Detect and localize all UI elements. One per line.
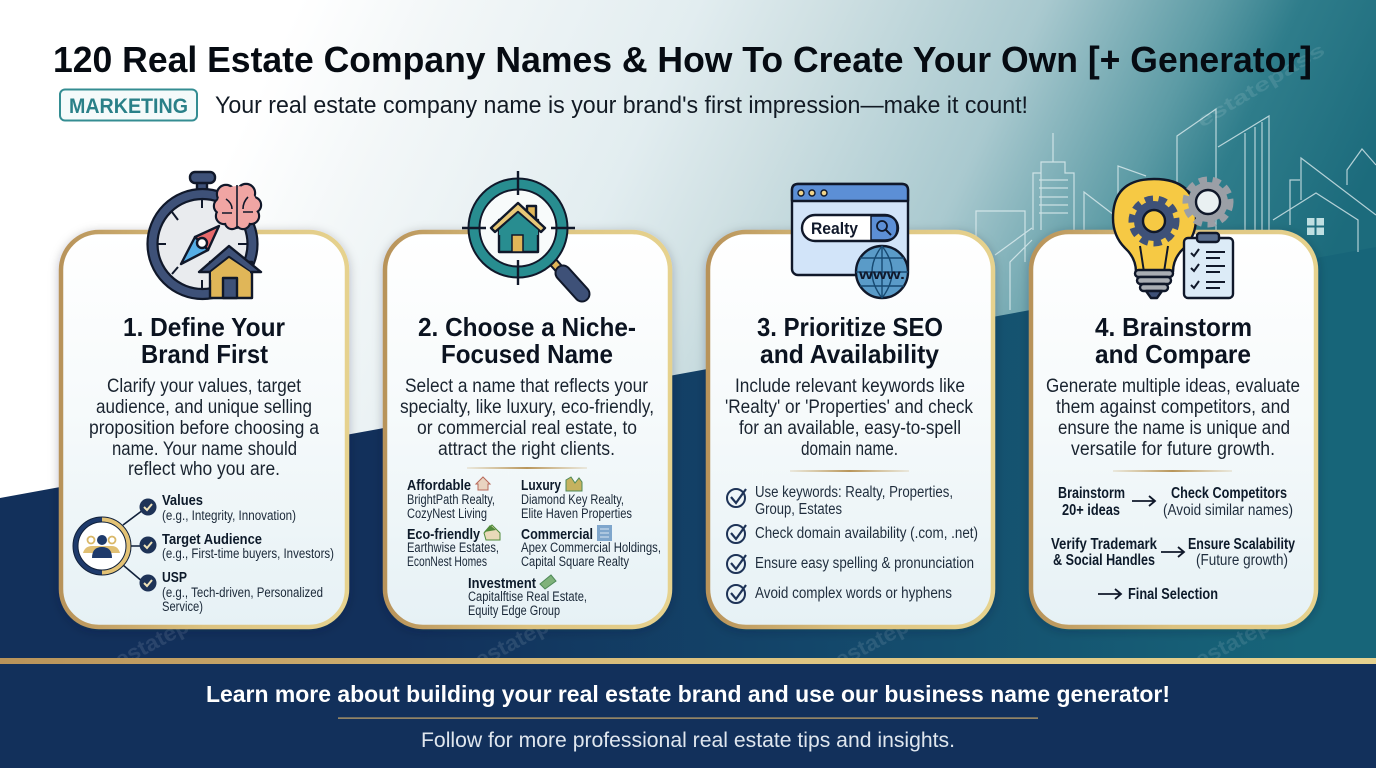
heading: 1. Define Your	[123, 312, 285, 342]
name list: affordable: BrightPath Realty,	[407, 492, 495, 507]
footer follow line: Follow for more professional real estate tips and insights.	[421, 729, 955, 752]
arrow	[1132, 496, 1155, 506]
name list: luxury	[521, 477, 632, 521]
name list: commercial: Capital Square Realty	[521, 554, 629, 569]
flow step: check competitors	[1163, 485, 1293, 519]
list: target audience	[140, 531, 334, 561]
arrow	[1098, 589, 1121, 599]
list: values	[140, 492, 296, 523]
watermarks: estatep	[831, 613, 913, 672]
checklist item: spelling: Ensure easy spelling & pronunciation	[755, 555, 974, 572]
name list: eco-friendly: Eco-friendly	[407, 526, 481, 543]
name list: eco-friendly	[407, 525, 500, 569]
name list: affordable: Affordable	[407, 477, 471, 494]
body text: versatile for future growth.	[1071, 439, 1275, 460]
subtitle: Your real estate company name is your brand's first impression—make it count!	[215, 92, 1028, 119]
category badge: marketing: MARKETING	[69, 95, 188, 118]
flow step: check competitors: (Avoid similar names)	[1163, 502, 1293, 519]
panel: 2 choose a niche-focused name	[385, 171, 670, 627]
lower diagonal band	[0, 247, 1376, 768]
flow step: verify trademark: Verify Trademark	[1051, 536, 1157, 553]
heading	[418, 312, 636, 369]
flow step: brainstorm	[1058, 485, 1125, 519]
title: 120 Real Estate Company Names & How To Create Your Own [+ Generator]	[53, 39, 1312, 80]
name list: investment	[468, 575, 587, 618]
panel: 1 define your brand first	[61, 172, 347, 627]
flow step: brainstorm: 20+ ideas	[1062, 502, 1120, 519]
checklist item: keywords: Group, Estates	[755, 501, 842, 518]
body text: attract the right clients.	[438, 439, 615, 460]
flow step: check competitors: Check Competitors	[1171, 485, 1287, 502]
icon: browser search globe: Realty	[811, 219, 858, 238]
body text: domain name.	[801, 439, 898, 460]
watermarks: estatepass	[1194, 40, 1329, 132]
list: usp: Service)	[162, 599, 203, 614]
body text: for an available, easy-to-spell	[739, 418, 961, 439]
name list: luxury: Diamond Key Realty,	[521, 492, 624, 507]
list: values: (e.g., Integrity, Innovation)	[162, 508, 296, 523]
skyline house window	[1307, 218, 1324, 235]
heading: and Availability	[760, 339, 940, 369]
icon: magnifier target house	[462, 171, 582, 294]
name list: affordable: CozyNest Living	[407, 506, 487, 521]
name list: commercial: Apex Commercial Holdings,	[521, 540, 661, 555]
flow step: brainstorm: Brainstorm	[1058, 485, 1125, 502]
name list: affordable	[407, 477, 495, 521]
icon: browser search globe	[792, 184, 908, 298]
body text: 'Realty' or 'Properties' and check	[725, 397, 973, 418]
watermarks	[111, 40, 1329, 672]
body text: Generate multiple ideas, evaluate	[1046, 376, 1300, 397]
flow step: verify trademark	[1051, 536, 1157, 569]
flow step: ensure scalability: Ensure Scalability	[1188, 536, 1295, 553]
icon: light bulb gears clipboard	[1113, 179, 1233, 298]
body text: reflect who you are.	[128, 459, 280, 480]
watermarks: estatepass	[1191, 594, 1308, 672]
list: target audience: (e.g., First-time buyers, Investors)	[162, 546, 334, 561]
name list: eco-friendly: EconNest Homes	[407, 554, 487, 569]
body text	[89, 376, 319, 480]
body text	[1046, 376, 1300, 460]
heading: and Compare	[1095, 339, 1251, 369]
footer call to action: Learn more about building your real estate brand and use our business name generator!	[206, 681, 1170, 707]
body text: or commercial real estate, to	[417, 418, 637, 439]
body text	[400, 376, 654, 460]
checklist item: hyphens: Avoid complex words or hyphens	[755, 585, 952, 602]
name list: luxury: Elite Haven Properties	[521, 506, 632, 521]
name list: commercial	[521, 525, 661, 569]
name list: investment: Capitalftise Real Estate,	[468, 589, 587, 604]
card 4 frame	[1031, 232, 1316, 627]
flow step: verify trademark: & Social Handles	[1053, 552, 1155, 569]
list: usp: USP	[162, 569, 187, 586]
category badge: marketing	[60, 90, 197, 120]
name list: commercial: Commercial	[521, 526, 593, 543]
list: usp	[140, 569, 323, 614]
body text: Select a name that reflects your	[405, 376, 649, 397]
checklist item: keywords	[727, 484, 953, 518]
skyline outline illustration	[976, 109, 1376, 310]
icon: stopwatch compass brain house	[148, 172, 261, 299]
list: values: Values	[162, 492, 203, 509]
list: target audience: Target Audience	[162, 531, 262, 548]
name list: investment: Investment	[468, 575, 536, 592]
heading: Focused Name	[441, 339, 613, 369]
body text: specialty, like luxury, eco-friendly,	[400, 397, 654, 418]
name list: luxury: Luxury	[521, 477, 562, 494]
body text	[725, 376, 973, 460]
heading	[757, 312, 943, 369]
body text: proposition before choosing a	[89, 418, 319, 439]
body text: audience, and unique selling	[96, 397, 312, 418]
checklist item: domain: Check domain availability (.com, .net)	[755, 525, 978, 542]
checklist item: keywords: Use keywords: Realty, Properties,	[755, 484, 953, 501]
name list: eco-friendly: Earthwise Estates,	[407, 540, 499, 555]
card 2 frame	[385, 232, 670, 627]
body text: them against competitors, and	[1056, 397, 1290, 418]
footer band	[0, 658, 1376, 768]
heading: 3. Prioritize SEO	[757, 312, 943, 342]
watermarks: estatep	[471, 613, 553, 672]
arrow	[1161, 547, 1184, 557]
panel: 4 brainstorm and compare	[1031, 179, 1316, 627]
heading: 4. Brainstorm	[1095, 312, 1252, 342]
body text: Clarify your values, target	[107, 376, 302, 397]
panel: 3 prioritize seo and availability	[708, 184, 993, 627]
heading	[123, 312, 285, 369]
diagram: brand hub	[73, 510, 143, 582]
name list: investment: Equity Edge Group	[468, 603, 560, 618]
watermarks: estatep	[111, 613, 193, 672]
body text: Include relevant keywords like	[735, 376, 965, 397]
card 3 frame	[708, 232, 993, 627]
heading: 2. Choose a Niche-	[418, 312, 636, 342]
list: usp: (e.g., Tech-driven, Personalized	[162, 585, 323, 600]
body text: name. Your name should	[112, 439, 297, 460]
flow step: final selection: Final Selection	[1128, 586, 1218, 603]
flow step: ensure scalability: (Future growth)	[1196, 552, 1288, 569]
heading: Brand First	[141, 339, 268, 369]
body text: ensure the name is unique and	[1058, 418, 1290, 439]
icon: browser search globe: www.	[858, 266, 905, 282]
card 1 frame	[61, 232, 347, 627]
flow step: ensure scalability	[1188, 536, 1295, 569]
heading	[1095, 312, 1252, 369]
